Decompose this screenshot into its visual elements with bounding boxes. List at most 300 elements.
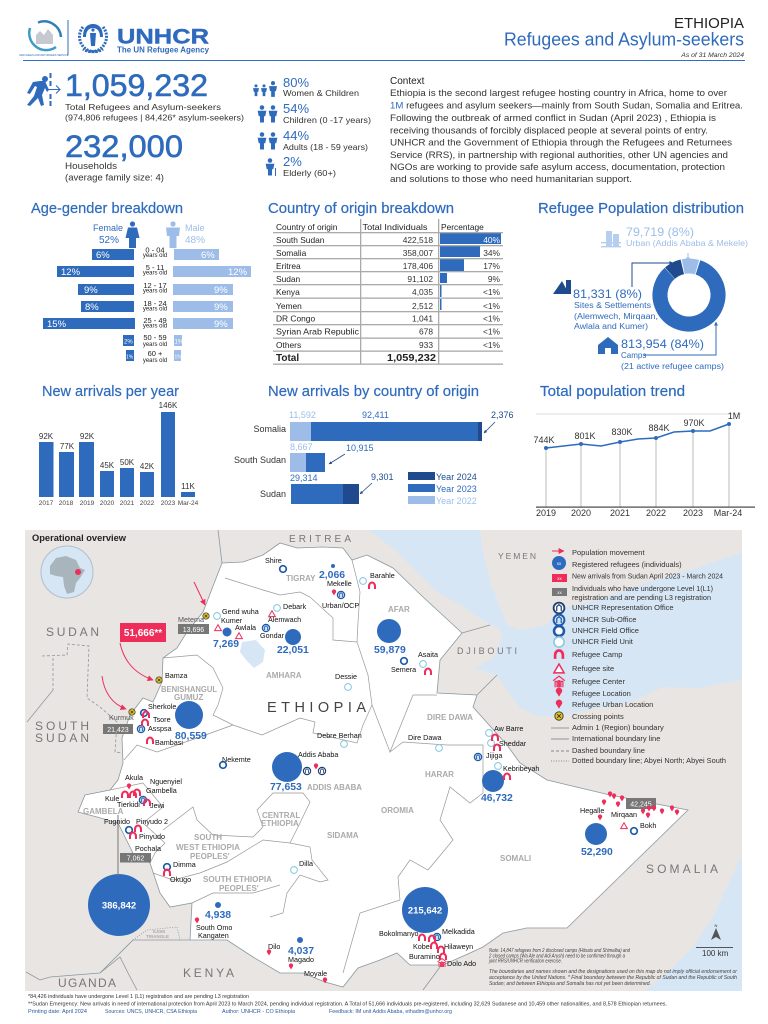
country labels: KENYA xyxy=(183,966,237,980)
footer notes: Sources: UNCS, UNHCR, CSA Ethiopia xyxy=(105,1009,198,1015)
place labels: Dolo Ado xyxy=(447,959,476,968)
figure: households: 232,000 xyxy=(65,128,183,164)
map disclaimer: acceptance by the United Nations. * Final boundary between the Republic of Sudan and the Republic of South xyxy=(489,975,737,981)
male bars xyxy=(173,249,251,361)
map legend: UNHCR Representation Office xyxy=(572,603,674,612)
refugee population circles xyxy=(88,564,607,943)
footer notes: *84,426 individuals have undergone Level 1 (L1) registration and are pending L3 registration xyxy=(28,994,249,1000)
heading: Country of origin breakdown xyxy=(268,201,454,217)
bar values: 12% xyxy=(61,267,81,278)
label: sites: Awlala and Kumer) xyxy=(574,322,648,331)
region labels: WEST ETHIOPIA xyxy=(176,843,240,852)
place labels: Barahle xyxy=(370,571,395,580)
bar chart: 2018 xyxy=(59,500,74,507)
footer notes: **Sudan Emergency: New arrivals in need of international protection from April 2023 to March 2024, pending individual registration. A Total of 51,666 individuals pre-registered, including 32,629 Sudanese and 10,459 other nationalities, and 8,578 Ethiopian returnees. xyxy=(28,1002,667,1008)
icon: sites xyxy=(553,280,571,294)
table: DR Congo xyxy=(276,314,315,324)
place labels: Dimma xyxy=(173,860,196,869)
bar values: 9% xyxy=(214,319,228,330)
stacked bar chart: South Sudan xyxy=(234,455,286,465)
place labels: South Omo xyxy=(196,923,232,932)
icon: person crossing border xyxy=(27,73,60,106)
refugee population numbers: 4,037 xyxy=(288,946,314,957)
panel: new arrivals by country of origin xyxy=(234,384,514,506)
stacked bar chart: 8,667 xyxy=(290,442,313,452)
place labels: Magado xyxy=(288,955,314,964)
heading: Refugee Population distribution xyxy=(538,201,744,217)
bar values: 6% xyxy=(201,250,215,261)
map legend: International boundary line xyxy=(572,734,660,743)
stat: 54%: Children (0 -17 years) xyxy=(283,115,371,125)
male label: 48% xyxy=(185,235,205,246)
stat: 80%: Women & Children xyxy=(283,88,359,98)
region labels: ETHIOPIA xyxy=(261,819,299,828)
bar values: 9% xyxy=(214,285,228,296)
country labels xyxy=(35,534,721,990)
representation offices xyxy=(303,767,326,775)
stat: 2%: Elderly (60+) xyxy=(283,168,336,178)
region labels: PEOPLES' xyxy=(190,852,230,861)
heading: Total population trend xyxy=(540,384,685,400)
age labels: years old xyxy=(143,342,167,348)
country labels: DJIBOUTI xyxy=(457,646,520,656)
map legend: UNHCR Field Office xyxy=(572,626,639,635)
panel: new arrivals per year xyxy=(39,384,199,507)
arrow: urban xyxy=(687,253,689,261)
scale bar and north arrow xyxy=(696,923,733,958)
label: urban: 79,719 (8%) xyxy=(626,225,694,239)
bar chart: 11K xyxy=(181,482,195,491)
icon: elderly xyxy=(266,158,276,176)
text: total caption: (974,806 refugees | 84,426* asylum-seekers) xyxy=(65,112,244,122)
place labels: Mekelle xyxy=(327,579,352,588)
stat: 54% xyxy=(283,101,371,125)
refugee population numbers: 4,938 xyxy=(205,910,231,921)
place labels: Awlala xyxy=(235,623,256,632)
refugee population numbers: 77,653 xyxy=(270,782,302,793)
place labels: Debark xyxy=(283,602,307,611)
lake xyxy=(240,640,265,668)
icon: female xyxy=(126,221,140,248)
stat: 80% xyxy=(283,75,359,98)
Indian Ocean xyxy=(645,855,742,991)
region labels: AMHARA xyxy=(266,671,302,680)
region labels: SOMALI xyxy=(500,854,531,863)
table: 34% xyxy=(483,248,501,258)
label: sites xyxy=(573,287,658,331)
bar values: 1% xyxy=(174,354,182,360)
callout: new arrivals from Sudan xyxy=(120,623,166,642)
place labels: Shire xyxy=(265,556,282,565)
context text xyxy=(390,76,743,184)
table: <1% xyxy=(483,314,501,324)
sub-offices xyxy=(137,591,482,941)
donut chart xyxy=(648,254,730,336)
line chart: 884K xyxy=(648,423,670,433)
refugee population numbers: 22,051 xyxy=(277,645,309,656)
bar chart: 146K xyxy=(159,401,178,410)
place labels: Buramino xyxy=(409,952,440,961)
place labels: Sheddar xyxy=(499,739,527,748)
international boundaries xyxy=(26,530,688,990)
country labels: SOUTH xyxy=(35,719,92,733)
region labels: OROMIA xyxy=(381,806,414,815)
legend: Year 2024 xyxy=(436,472,477,482)
line chart xyxy=(533,411,755,518)
text: households caption: (average family size: 4) xyxy=(65,172,164,182)
table: 422,518 xyxy=(403,235,433,245)
field offices xyxy=(126,566,637,870)
region labels: TRIANGLE xyxy=(146,934,169,939)
table: Percentage xyxy=(441,222,484,232)
stacked bar chart xyxy=(234,410,514,504)
map legend: UNHCR Sub-Office xyxy=(572,615,636,624)
refugee population numbers: 7,269 xyxy=(213,639,239,650)
refugee population numbers: 52,290 xyxy=(581,847,613,858)
bar chart: 2017 xyxy=(39,500,54,507)
table: Eritrea xyxy=(276,261,301,271)
map legend: Refugee Center xyxy=(572,677,625,686)
refugee population numbers: 59,879 xyxy=(374,645,406,656)
stat: 44%: 44% xyxy=(283,128,309,143)
country labels: SUDAN xyxy=(46,625,102,639)
age labels: 18 - 24 xyxy=(143,299,167,308)
line chart: 1M xyxy=(728,411,740,421)
bar chart: 2021 xyxy=(120,500,135,507)
pending L3 boxes: 42,245 xyxy=(630,802,652,808)
age labels: years old xyxy=(143,306,167,312)
male label: Male xyxy=(185,223,205,233)
line chart: 830K xyxy=(611,427,633,437)
place labels: Dessie xyxy=(335,672,357,681)
place labels: Dilo xyxy=(268,942,280,951)
context text: NGOs are working to provide safe asylum access, documentation, protection xyxy=(390,161,725,172)
place labels: Asspsa xyxy=(148,724,172,733)
place labels: Pinyudo xyxy=(139,832,165,841)
map legend: Refugee Camp xyxy=(572,650,622,659)
context text: and solutions to those who need humanitarian support. xyxy=(390,173,632,184)
context text: Following the outbreak of armed conflict in Sudan (April 2023) , Ethiopia is xyxy=(390,112,716,123)
field units xyxy=(214,578,501,873)
place labels: Kumer xyxy=(221,616,243,625)
place labels: Kebribeyah xyxy=(503,764,539,773)
refugee population numbers: 80,559 xyxy=(175,731,207,742)
age labels: 60 + xyxy=(148,349,163,358)
place labels: Jewi xyxy=(150,801,165,810)
place labels: Gambella xyxy=(146,786,177,795)
country labels: SUDAN xyxy=(35,731,92,745)
place labels: Nekemte xyxy=(222,755,251,764)
bar chart: 2019 xyxy=(80,500,95,507)
line chart: 2019 xyxy=(536,508,556,518)
age labels: 50 - 59 xyxy=(143,333,167,342)
context text: Service (RRS), in partnership with regional authorities, other UN agencies and xyxy=(390,149,728,160)
map legend: xx xyxy=(557,590,562,595)
table: South Sudan xyxy=(276,235,325,245)
stacked bar chart: 10,915 xyxy=(346,443,374,453)
stacked bar chart: Sudan xyxy=(260,489,286,499)
label: sites: Sites & Settlements xyxy=(574,301,651,310)
stat: 44% xyxy=(283,128,368,152)
refugee sites xyxy=(215,611,627,829)
map note xyxy=(488,948,631,964)
bar values: 8% xyxy=(85,302,99,313)
header xyxy=(19,15,745,61)
table: 17% xyxy=(483,261,501,271)
stacked bar chart: 29,314 xyxy=(290,473,318,483)
refugee locations xyxy=(127,589,679,983)
bar values xyxy=(47,250,248,360)
age labels: years old xyxy=(143,324,167,330)
bar values: 6% xyxy=(96,250,110,261)
Ethiopia xyxy=(78,543,688,987)
map legend: Individuals who have undergone Level 1(L1) xyxy=(572,584,713,593)
table: 1,041 xyxy=(412,314,433,324)
age labels: 5 - 11 xyxy=(146,263,164,272)
age labels: years old xyxy=(143,358,167,364)
line chart: 2021 xyxy=(610,508,630,518)
country labels: ERITREA xyxy=(289,534,354,545)
stat: 2% xyxy=(283,154,336,178)
place labels: Gend wuha xyxy=(222,607,259,616)
logo: RRS xyxy=(19,21,69,57)
table: <1% xyxy=(483,340,501,350)
table: 9% xyxy=(488,274,501,284)
logo: UNHCR: The UN Refugee Agency xyxy=(117,46,210,54)
map background xyxy=(25,530,742,991)
table: Sudan xyxy=(276,274,301,284)
map legend: Dashed boundary line xyxy=(572,746,645,755)
legend: Year 2022 xyxy=(436,496,477,506)
region labels: GAMBELA xyxy=(83,807,124,816)
crossing points xyxy=(129,613,209,715)
map legend: Crossing points xyxy=(572,712,624,721)
table: Others xyxy=(276,340,301,350)
place labels: Kule xyxy=(105,794,119,803)
map legend: Refugee Location xyxy=(572,689,631,698)
arrow: sites xyxy=(632,263,673,287)
text: total caption: Total Refugees and Asylum-seekers xyxy=(65,102,221,112)
female label xyxy=(93,223,123,246)
bar values: 1% xyxy=(126,354,134,360)
stat: 2%: 2% xyxy=(283,154,302,169)
percentage bars xyxy=(440,233,501,310)
footer notes: Feedback: IM unit Addis Ababa, ethadim@unhcr.org xyxy=(329,1009,452,1015)
place labels: Mirqaan xyxy=(611,810,637,819)
icon: male xyxy=(166,221,180,248)
place labels: Kangaten xyxy=(198,931,229,940)
bar chart: 45K xyxy=(100,461,115,470)
label: urban: Urban (Addis Ababa & Mekele) xyxy=(626,239,748,248)
stacked bar chart: Somalia xyxy=(253,424,286,434)
place labels: Hegalle xyxy=(580,806,604,815)
title xyxy=(504,15,744,59)
text: households caption: Households xyxy=(65,161,118,171)
context text: receiving thousands of forcibly displaced people at several points of entry. xyxy=(390,124,708,136)
admin boundaries xyxy=(110,560,483,973)
place labels: Bokolmanyo xyxy=(379,929,419,938)
icon: camps xyxy=(598,337,618,354)
country labels: SOMALIA xyxy=(646,862,721,876)
figure: total: 1,059,232 xyxy=(65,67,208,103)
context text: UNHCR and the Government of Ethiopia through the Refugees and Returnees xyxy=(390,136,732,148)
callout: new arrivals from Sudan: 51,666** xyxy=(124,628,162,639)
place labels: Nguenyiel xyxy=(150,777,182,786)
place labels: Sherkole xyxy=(148,702,176,711)
table: Somalia xyxy=(276,248,307,258)
label: urban xyxy=(626,225,748,248)
bar values: 9% xyxy=(214,302,228,313)
region labels: BENISHANGUL xyxy=(161,685,217,694)
label: sites: (Alemwech, Mirqaan, xyxy=(574,312,658,321)
place labels: Kobe xyxy=(413,942,430,951)
map disclaimer xyxy=(489,969,738,987)
region labels: SOUTH ETHIOPIA xyxy=(203,875,272,884)
place labels: Pinyudo 2 xyxy=(136,817,168,826)
map legend: xx xyxy=(557,561,562,566)
bar chart: 92K xyxy=(80,432,95,441)
table: Kenya xyxy=(276,287,300,297)
map legend: xx xyxy=(557,576,562,581)
place labels: Gondar xyxy=(260,631,285,640)
map legend: Admin 1 (Region) boundary xyxy=(572,723,664,732)
place labels: Metema xyxy=(178,615,204,624)
label: camps: Camps xyxy=(621,351,646,360)
map note: Note: 14,847 refugees from 2 disclosed camps (Hitsats and Shimelba) and xyxy=(489,948,631,954)
refugee population numbers: 386,842 xyxy=(102,900,136,912)
bar chart: Mar-24 xyxy=(178,500,199,507)
table: 2,512 xyxy=(412,301,433,311)
map disclaimer: Sudan; and between Ethiopia and Somalia has not yet been determined. xyxy=(489,981,651,987)
line chart: Mar-24 xyxy=(714,508,742,518)
heading: Age-gender breakdown xyxy=(31,201,183,217)
region labels: AFAR xyxy=(388,605,410,614)
bar chart: 2022 xyxy=(140,500,155,507)
place labels xyxy=(104,556,656,978)
label: camps: 813,954 (84%) xyxy=(621,337,704,351)
region labels: PEOPLES' xyxy=(219,884,259,893)
table: <1% xyxy=(483,301,501,311)
panel: operational overview map xyxy=(25,530,742,991)
place labels: Addis Ababa xyxy=(298,750,338,759)
table: <1% xyxy=(483,287,501,297)
refugee population numbers: 2,066 xyxy=(319,570,345,581)
icon: adults xyxy=(258,132,277,150)
place labels: Kurmuk xyxy=(109,713,134,722)
label: sites: 81,331 (8%) xyxy=(573,287,642,301)
region labels xyxy=(83,574,531,939)
place labels: Debre Berhan xyxy=(317,731,362,740)
age labels xyxy=(143,246,167,364)
line chart: 2020 xyxy=(571,508,591,518)
place labels: Bambasi xyxy=(155,738,183,747)
place labels: Hilaweyn xyxy=(444,942,473,951)
bar values: 2% xyxy=(124,340,133,346)
table: Total xyxy=(276,353,299,364)
place labels: Urban/OCP xyxy=(322,601,359,610)
map legend: Dotted boundary line; Abyei North; Abyei South xyxy=(572,756,726,765)
map legend: New arrivals from Sudan April 2023 - March 2024 xyxy=(572,572,723,580)
table: Country of origin xyxy=(276,222,338,232)
place labels: Fugnido xyxy=(104,817,130,826)
table: 1,059,232 xyxy=(387,353,436,364)
place labels: Moyale xyxy=(304,969,327,978)
place labels: Asaita xyxy=(418,650,438,659)
line chart: 2022 xyxy=(646,508,666,518)
table: 933 xyxy=(419,340,433,350)
text: households caption xyxy=(65,161,164,182)
bar chart: 42K xyxy=(140,462,155,471)
table: Yemen xyxy=(276,301,302,311)
table: Total Individuals xyxy=(362,222,428,232)
context text: Ethiopia is the second largest refugee hosting country in Africa, home to over xyxy=(390,87,727,98)
panel: total population trend xyxy=(533,384,755,518)
region labels: SIDAMA xyxy=(327,831,359,840)
panel: age-gender breakdown xyxy=(31,201,251,364)
legend xyxy=(408,472,477,506)
map note: joint RRS/UNHCR verification exercise. xyxy=(488,958,562,964)
bar values: 15% xyxy=(47,319,67,330)
logo: UNHCR: UNHCR xyxy=(117,24,210,48)
label: camps: (21 active refugee camps) xyxy=(621,362,724,371)
table: 358,007 xyxy=(403,248,433,258)
footer notes xyxy=(28,994,667,1015)
female bars xyxy=(43,249,135,361)
table: 178,406 xyxy=(403,261,433,271)
age labels: years old xyxy=(143,270,167,276)
country labels: UGANDA xyxy=(58,976,119,990)
female label: Female xyxy=(93,223,123,233)
scale bar and north arrow: 100 km xyxy=(702,949,729,958)
refugee population numbers: 215,642 xyxy=(408,906,442,916)
text: total caption xyxy=(65,102,244,122)
region labels: GUMUZ xyxy=(174,693,203,702)
logo: UNHCR xyxy=(68,20,210,55)
pending L3 boxes: 13,696 xyxy=(183,627,204,634)
context text: Context xyxy=(390,76,425,87)
line chart: 801K xyxy=(574,431,596,441)
map note: 2 closed camps (Wa Ale and Adi Arush) need to be confirmed through a xyxy=(488,954,625,960)
heading: New arrivals per year xyxy=(42,384,179,400)
legend: Year 2023 xyxy=(436,484,477,494)
region labels: TIGRAY xyxy=(286,574,316,583)
icon: globe xyxy=(41,546,93,598)
population movement arrows xyxy=(102,582,205,709)
refugee population numbers: 46,732 xyxy=(481,793,513,804)
panel: refugee population distribution xyxy=(538,201,748,371)
line chart: 970K xyxy=(683,418,705,428)
male label xyxy=(185,223,205,246)
heading: operational overview: Operational overview xyxy=(32,533,127,543)
place labels: Akula xyxy=(125,773,143,782)
age labels: years old xyxy=(143,288,167,294)
map legend: Registered refugees (individuals) xyxy=(572,560,682,569)
bar chart: 92K xyxy=(39,432,54,441)
age labels: years old xyxy=(143,253,167,259)
age labels: 25 - 49 xyxy=(143,316,167,325)
age labels: 12 - 17 xyxy=(143,281,167,290)
panel: country of origin breakdown xyxy=(268,201,503,365)
place labels: Semera xyxy=(391,665,416,674)
country labels: YEMEN xyxy=(498,551,539,561)
footer notes: Author: UNHCR - CO Ethiopia xyxy=(222,1009,296,1015)
key figures xyxy=(27,67,244,182)
stacked bar chart: 11,592 xyxy=(289,410,316,420)
bar values: 12% xyxy=(228,267,248,278)
region labels: DIRE DAWA xyxy=(427,713,473,722)
age labels: 0 - 04 xyxy=(145,246,165,254)
place labels: Jijiga xyxy=(486,751,502,760)
